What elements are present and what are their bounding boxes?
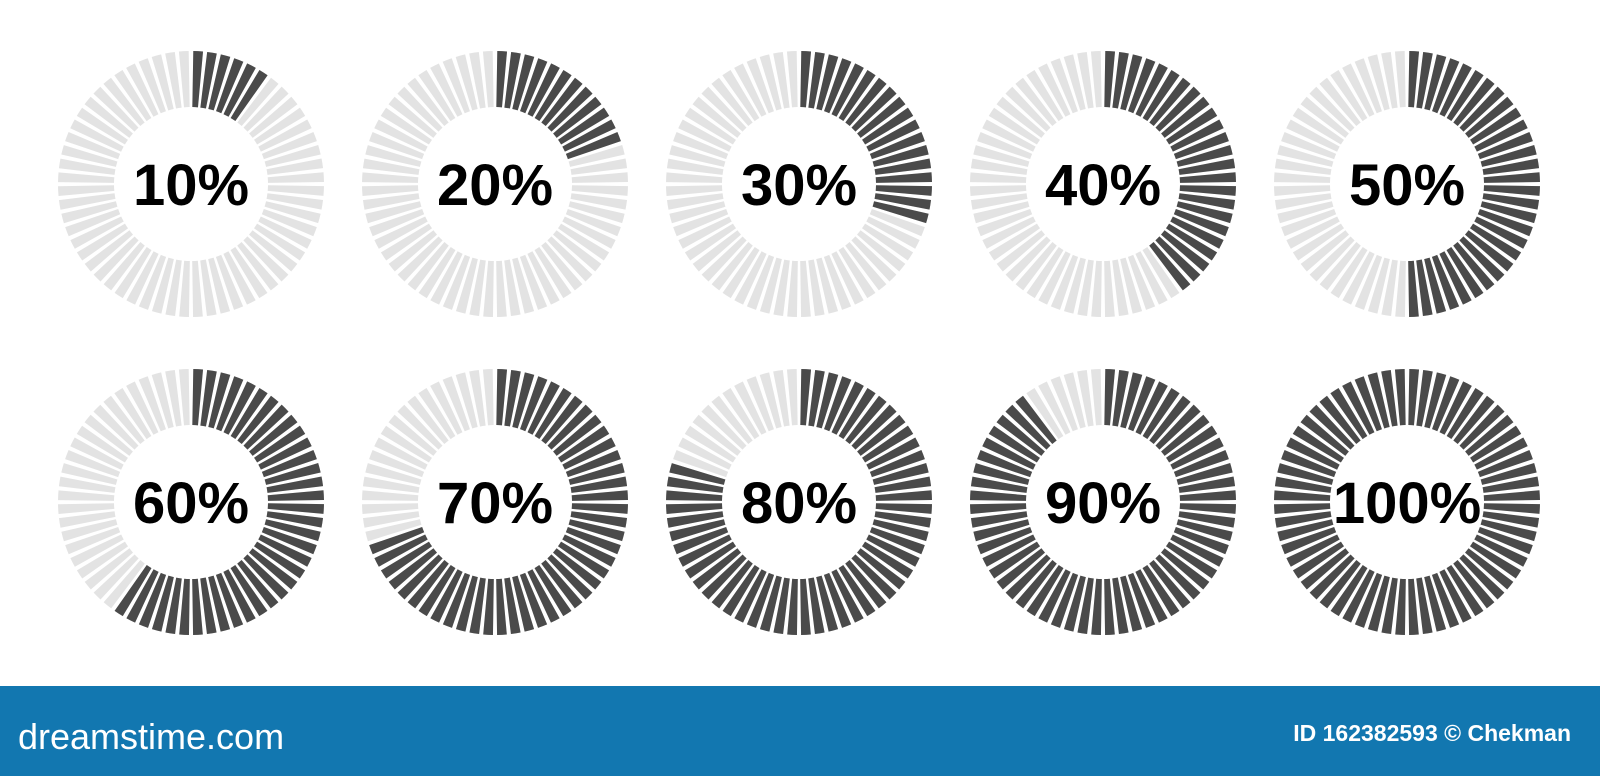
ring: 80%: 80% <box>741 471 857 536</box>
ring: 60%: 60% <box>133 471 249 536</box>
ring: 30%: 30% <box>741 153 857 218</box>
credit text: ID 162382593 © Chekman <box>1293 720 1571 746</box>
ring: 10% <box>86 79 296 289</box>
ring: 20% <box>390 79 600 289</box>
footer banner <box>0 686 1600 776</box>
ring: 100%: 100% <box>1333 471 1481 536</box>
ring: 70% <box>390 397 600 607</box>
ring: 70%: 70% <box>437 471 553 536</box>
ring: 80% <box>694 397 904 607</box>
ring: 90% <box>998 397 1208 607</box>
ring: 90%: 90% <box>1045 471 1161 536</box>
ring: 40% <box>998 79 1208 289</box>
ring: 50%: 50% <box>1349 153 1465 218</box>
ring: 60% <box>86 397 296 607</box>
ring: 40%: 40% <box>1045 153 1161 218</box>
ring: 10%: 10% <box>133 153 249 218</box>
ring: 30% <box>694 79 904 289</box>
ring: 100% <box>1302 397 1512 607</box>
ring: 20%: 20% <box>437 153 553 218</box>
logo text: dreamstime.com <box>18 716 284 757</box>
ring: 50% <box>1302 79 1512 289</box>
